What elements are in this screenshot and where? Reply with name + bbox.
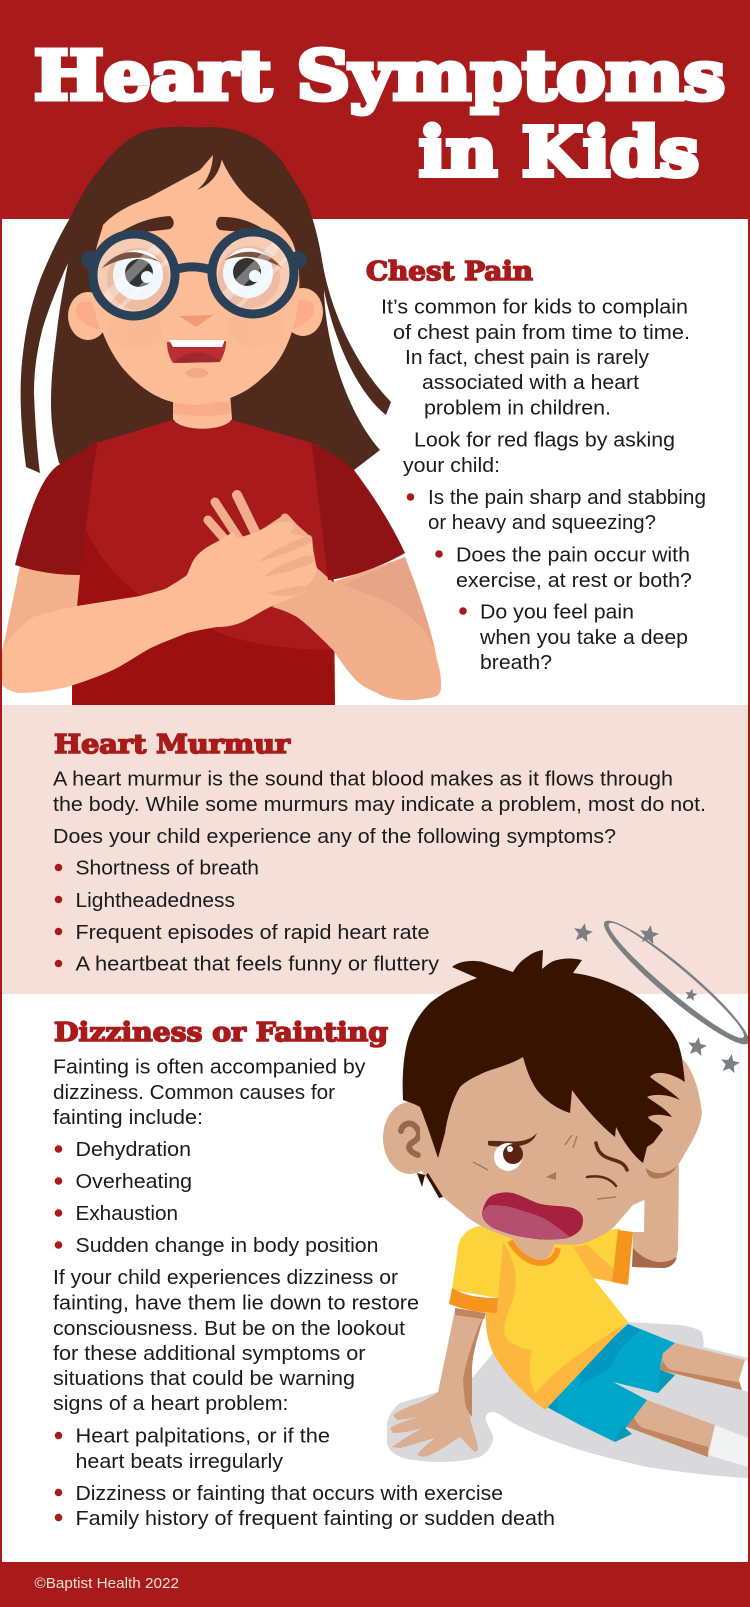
text block: heart murmur intro: the body. While some murmurs may indicate a problem, most do not.	[53, 793, 706, 816]
footer band	[0, 1562, 750, 1607]
left ear	[68, 292, 108, 340]
panel: heart murmur background	[0, 705, 750, 994]
text block: chest pain intro	[381, 296, 690, 477]
head	[418, 1020, 665, 1245]
list: common causes: Exhaustion	[76, 1202, 178, 1225]
text block: chest pain intro: associated with a heart	[422, 371, 639, 394]
heading: heart murmur: Heart Murmur	[54, 730, 290, 760]
closed eye and brow	[587, 1143, 627, 1186]
list: common causes: Dehydration	[76, 1138, 191, 1161]
right ear	[283, 288, 323, 336]
text block: what to do: consciousness. But be on the lookout	[53, 1317, 405, 1340]
glasses frame	[81, 232, 307, 316]
upper leg	[660, 1343, 748, 1392]
list: common causes: Overheating	[76, 1170, 192, 1193]
face	[93, 155, 299, 405]
list: chest pain questions: or heavy and squeezing?	[428, 511, 656, 534]
text block: what to do: situations that could be warning	[53, 1367, 355, 1390]
list: chest pain questions	[407, 486, 706, 674]
text block: what to do: signs of a heart problem:	[53, 1392, 288, 1415]
text block: fainting intro: fainting include:	[53, 1106, 203, 1129]
left upper arm	[2, 566, 80, 652]
hand on head	[645, 1058, 702, 1176]
nose	[179, 315, 213, 327]
left sleeve	[15, 441, 98, 575]
list: chest pain questions: breath?	[480, 651, 552, 674]
mouth	[482, 1192, 583, 1240]
text block: what to do: for these additional symptoms or	[53, 1342, 366, 1365]
header band	[0, 0, 750, 219]
list: warning signs: Heart palpitations, or if the	[76, 1424, 330, 1448]
illustration: girl holding her chest	[2, 127, 441, 705]
back hand and fingers	[208, 495, 317, 600]
text block: fainting intro: Fainting is often accompanied by	[53, 1056, 366, 1078]
right arm	[272, 557, 441, 700]
list: heart murmur symptoms	[55, 857, 440, 976]
lower leg	[622, 1400, 748, 1467]
ear	[383, 1102, 437, 1174]
heading: dizziness or fainting: Dizziness or Fainting	[54, 1018, 388, 1048]
hand finger shading	[258, 535, 314, 596]
list: warning signs: heart beats irregularly	[76, 1450, 284, 1473]
list: chest pain questions: exercise, at rest or both?	[456, 569, 692, 592]
list: chest pain questions: when you take a deep	[479, 626, 688, 649]
heading: chest pain: Chest Pain	[366, 257, 533, 287]
text block: chest pain intro: your child:	[403, 454, 500, 477]
parting lock	[197, 155, 222, 190]
list: common causes: Sudden change in body position	[76, 1234, 378, 1257]
list: chest pain questions: Is the pain sharp and stabbing	[428, 486, 706, 509]
right sleeve	[311, 441, 405, 580]
mouth	[167, 341, 226, 363]
front arm and hand	[2, 522, 317, 693]
hair	[403, 950, 685, 1163]
text block: heart murmur intro	[53, 768, 706, 848]
floor shadow	[387, 1322, 748, 1478]
shorts	[545, 1324, 675, 1442]
text block: what to do	[53, 1266, 419, 1415]
text block: chest pain intro: Look for red flags by asking	[414, 428, 675, 452]
text block: chest pain intro: It’s common for kids to complain	[381, 296, 688, 318]
neck	[173, 392, 232, 429]
illustration: dizzy boy sitting on the floor	[383, 950, 748, 1478]
shirt body	[72, 420, 335, 705]
text block: chest pain intro: problem in children.	[424, 396, 611, 420]
text block: what to do: fainting, have them lie down to restore	[53, 1292, 419, 1314]
raised forearm	[632, 1165, 679, 1268]
list: heart murmur symptoms: Frequent episodes of rapid heart rate	[76, 921, 430, 944]
list: heart murmur symptoms: Lightheadedness	[76, 889, 235, 912]
title: Heart Symptoms	[34, 36, 725, 115]
hair	[21, 127, 391, 480]
text block: heart murmur intro: A heart murmur is the sound that blood makes as it flows through	[53, 768, 673, 790]
text block: fainting intro: dizziness. Common causes for	[53, 1081, 335, 1104]
text block: chest pain intro: In fact, chest pain is rarely	[405, 346, 650, 369]
title: in Kids	[419, 112, 699, 192]
text block: what to do: If your child experiences dizziness or	[53, 1266, 398, 1289]
icon: dizzy halo with stars	[572, 910, 750, 1074]
list: chest pain questions: Does the pain occur with	[456, 544, 690, 566]
title	[34, 36, 725, 192]
right lens and eye	[216, 236, 290, 310]
support arm and hand	[390, 1308, 486, 1457]
list: heart murmur symptoms: A heartbeat that feels funny or fluttery	[76, 953, 440, 976]
list: warning signs	[55, 1424, 555, 1530]
text block: fainting intro	[53, 1056, 366, 1129]
list: warning signs: Dizziness or fainting that occurs with exercise	[76, 1482, 503, 1505]
shirt	[449, 1226, 633, 1410]
list: heart murmur symptoms: Shortness of breath	[76, 857, 259, 880]
cheeks	[107, 308, 284, 350]
text block: heart murmur intro: Does your child experience any of the following symptoms?	[53, 825, 616, 848]
left eye and brow	[488, 1133, 537, 1171]
eyebrows	[113, 216, 174, 237]
list: chest pain questions: Do you feel pain	[480, 600, 634, 624]
list: common causes	[55, 1138, 378, 1257]
list: warning signs: Family history of frequent fainting or sudden death	[76, 1507, 555, 1530]
left lens and eye	[98, 238, 170, 312]
footer copyright: ©Baptist Health 2022	[34, 1575, 179, 1592]
text block: chest pain intro: of chest pain from time to time.	[393, 321, 690, 344]
